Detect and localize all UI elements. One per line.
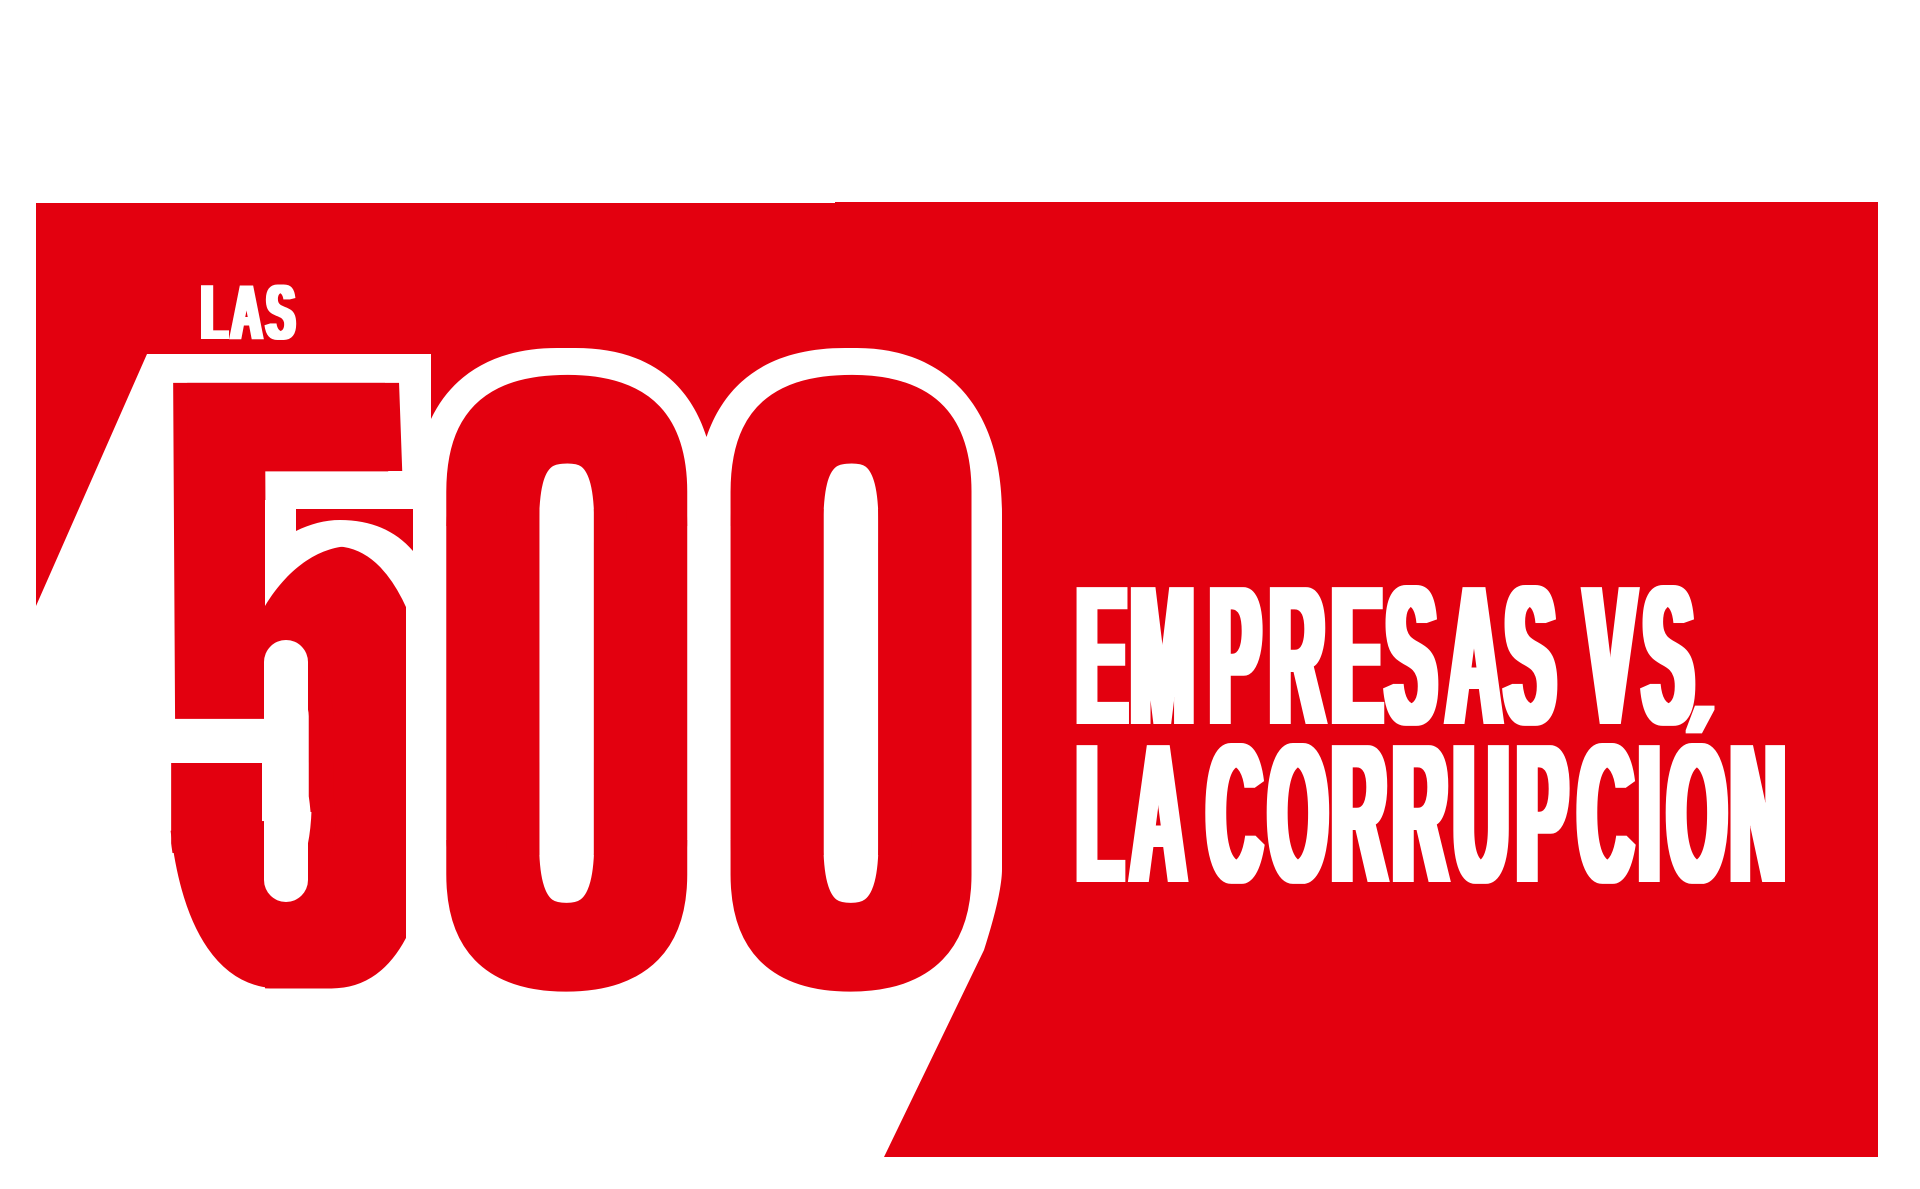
headline line 1: EMPRESAS VS: EMPRESAS VS — [1077, 544, 1693, 766]
big number: 500 — [153, 194, 973, 1164]
digits 00: 00 — [445, 514, 973, 849]
headline line 2: LA CORRUPCIÓN: LA CORRUPCIÓN — [1077, 702, 1785, 924]
panel: red background with white halo cut-out — [36, 202, 1878, 1157]
white shoulder above the bowl of the five — [265, 534, 352, 606]
red inner corner of the five — [296, 509, 413, 551]
kicker: LAS: LAS — [201, 270, 295, 356]
digit 5: 5 — [153, 194, 424, 1164]
white slot inside the five — [264, 640, 308, 902]
